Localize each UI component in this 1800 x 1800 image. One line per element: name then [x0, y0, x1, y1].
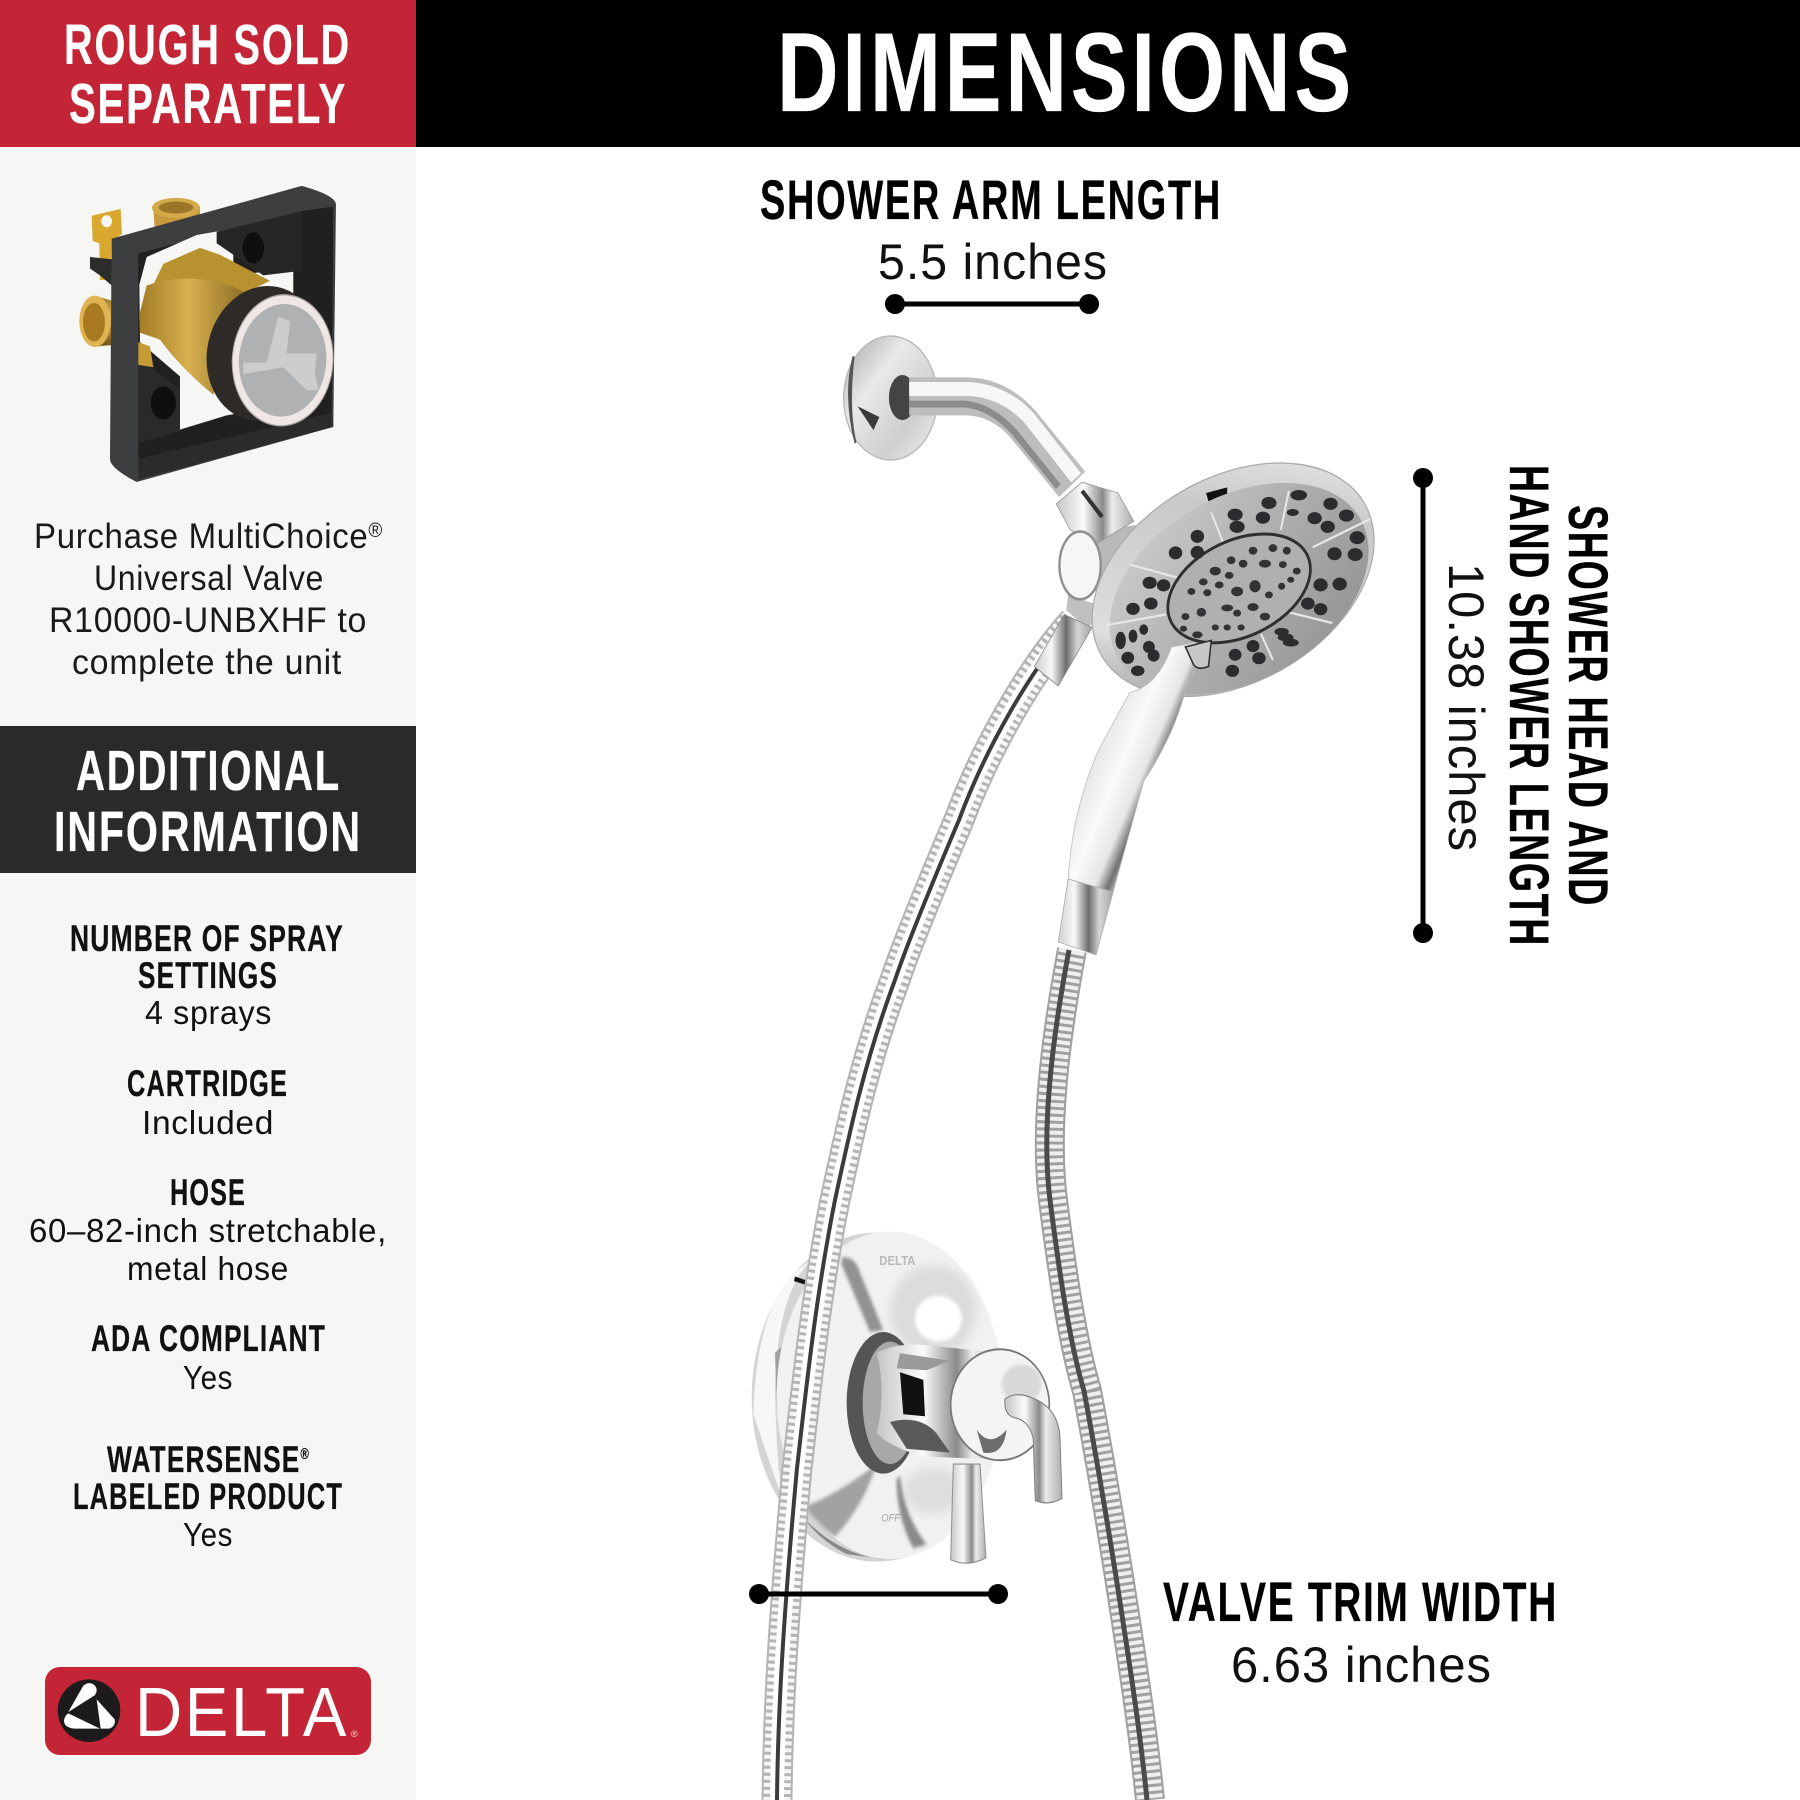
lower lever [951, 1464, 986, 1563]
label: VALVE TRIM WIDTH [1163, 1570, 1558, 1633]
wall flange [844, 336, 937, 460]
valve body [847, 1332, 920, 1474]
body reflection [900, 1372, 925, 1416]
spec: ada compliant: Yes [183, 1359, 233, 1396]
measure line [749, 1584, 1008, 1604]
spec: watersense labeled product: Yes [183, 1516, 233, 1553]
logo: delta [45, 1667, 371, 1755]
label line 1: SHOWER HEAD AND [1557, 505, 1620, 907]
trigger [1185, 640, 1211, 668]
label: SHOWER ARM LENGTH [760, 168, 1222, 231]
spec: watersense labeled product [73, 1439, 343, 1553]
heading: rough sold separately [64, 13, 351, 136]
rim slot [1206, 487, 1227, 502]
escutcheon lettering: DELTA [879, 1253, 916, 1268]
spec: cartridge: Included [142, 1104, 274, 1141]
measure line [1413, 468, 1433, 943]
shoulder between swivel and head [1094, 523, 1154, 599]
spec: ada compliant: ADA COMPLIANT [91, 1318, 326, 1359]
hose connector [1034, 614, 1092, 686]
spec: ada compliant [91, 1318, 326, 1396]
text: purchase universal valve note: Universal Valve [94, 559, 324, 598]
dark collar [195, 269, 331, 438]
valve trim [752, 1231, 1062, 1563]
registered mark: ® [351, 1729, 358, 1739]
measure line [885, 294, 1099, 314]
grey cap [230, 291, 336, 430]
panel: left sidebar background [0, 147, 416, 1800]
image: shower system [752, 336, 1409, 1800]
head face [1079, 441, 1400, 736]
cross on cap [243, 317, 318, 390]
brass top block [150, 248, 270, 298]
spec: watersense labeled product: ® [300, 1446, 310, 1463]
diverter knob [1059, 532, 1101, 599]
brass body [140, 278, 248, 395]
heading: additional information: ADDITIONAL [76, 739, 341, 803]
heading: additional information [54, 739, 362, 864]
dimension: shower head and hand shower length [1413, 465, 1620, 947]
heading: rough sold separately: SEPARATELY [69, 72, 347, 136]
inner spray ring [1153, 513, 1325, 664]
spec: watersense labeled product: WATERSENSE [107, 1439, 380, 1480]
spec: number of spray settings: NUMBER OF SPRAY [70, 918, 344, 959]
image: rough-in valve [79, 186, 344, 482]
hose bracket [1066, 595, 1098, 627]
heading: additional information: INFORMATION [54, 800, 362, 864]
head rim [1058, 417, 1409, 743]
valve trim: OFF [881, 1513, 901, 1525]
escutcheon face [777, 1231, 1003, 1559]
top fitting [153, 209, 200, 257]
spec: hose: metal hose [127, 1250, 289, 1287]
brass bracket [92, 209, 122, 280]
spec: number of spray settings: 4 sprays [145, 994, 272, 1031]
value: 10.38 inches [1438, 563, 1494, 852]
text: purchase universal valve note: ® [368, 520, 383, 542]
handle [1068, 643, 1197, 892]
chrome ring [221, 279, 344, 441]
shower arm, head and handle [844, 336, 1409, 955]
end cap [951, 1349, 1049, 1460]
text: purchase universal valve note [34, 517, 383, 682]
panel: additional information header [0, 726, 416, 873]
handle connector [1058, 879, 1113, 955]
label line 2: HAND SHOWER LENGTH [1498, 465, 1561, 947]
arm [909, 389, 1076, 486]
flange neck [889, 375, 916, 420]
inner nozzles [1180, 544, 1301, 638]
spec: hose: 60–82-inch stretchable, [29, 1212, 387, 1249]
spec: watersense labeled product: LABELED PRODUCT [73, 1476, 343, 1517]
hose: left [777, 621, 1074, 1800]
frame window [139, 229, 293, 430]
dimension: shower arm length [760, 168, 1222, 314]
text: purchase universal valve note: Purchase MultiChoice [34, 517, 388, 556]
spec: hose [29, 1172, 387, 1287]
panel: dimensions title bar [416, 0, 1800, 147]
escutcheon back rim [752, 1233, 1002, 1562]
spec: cartridge: CARTRIDGE [127, 1063, 288, 1104]
value: 6.63 inches [1231, 1637, 1492, 1693]
black tab [90, 257, 113, 287]
face spokes [1106, 491, 1370, 660]
plastic frame [110, 186, 336, 482]
spec: number of spray settings: SETTINGS [138, 955, 278, 996]
panel: rough sold separately banner [0, 0, 416, 147]
hose: right [1047, 950, 1150, 1800]
escutcheon reflections [890, 1265, 977, 1357]
swivel collar [1056, 482, 1134, 543]
value: 5.5 inches [878, 234, 1108, 290]
wordmark: DELTA [135, 1673, 349, 1751]
brass lower tab [138, 342, 153, 367]
spec: hose: HOSE [170, 1172, 246, 1213]
left fitting [95, 296, 147, 347]
outer nozzles [1115, 490, 1365, 677]
icon: delta triangle mark [58, 1679, 120, 1742]
text: purchase universal valve note: R10000-UNBXHF to [49, 601, 367, 640]
dimension: valve trim width [749, 1570, 1558, 1693]
upper lever [1005, 1395, 1062, 1503]
title: DIMENSIONS [777, 10, 1355, 135]
heading: rough sold separately: ROUGH SOLD [64, 13, 351, 77]
text: purchase universal valve note: complete the unit [72, 643, 342, 682]
spec: cartridge [127, 1063, 288, 1141]
spec: number of spray settings [70, 918, 344, 1031]
frame fasteners [138, 211, 302, 443]
